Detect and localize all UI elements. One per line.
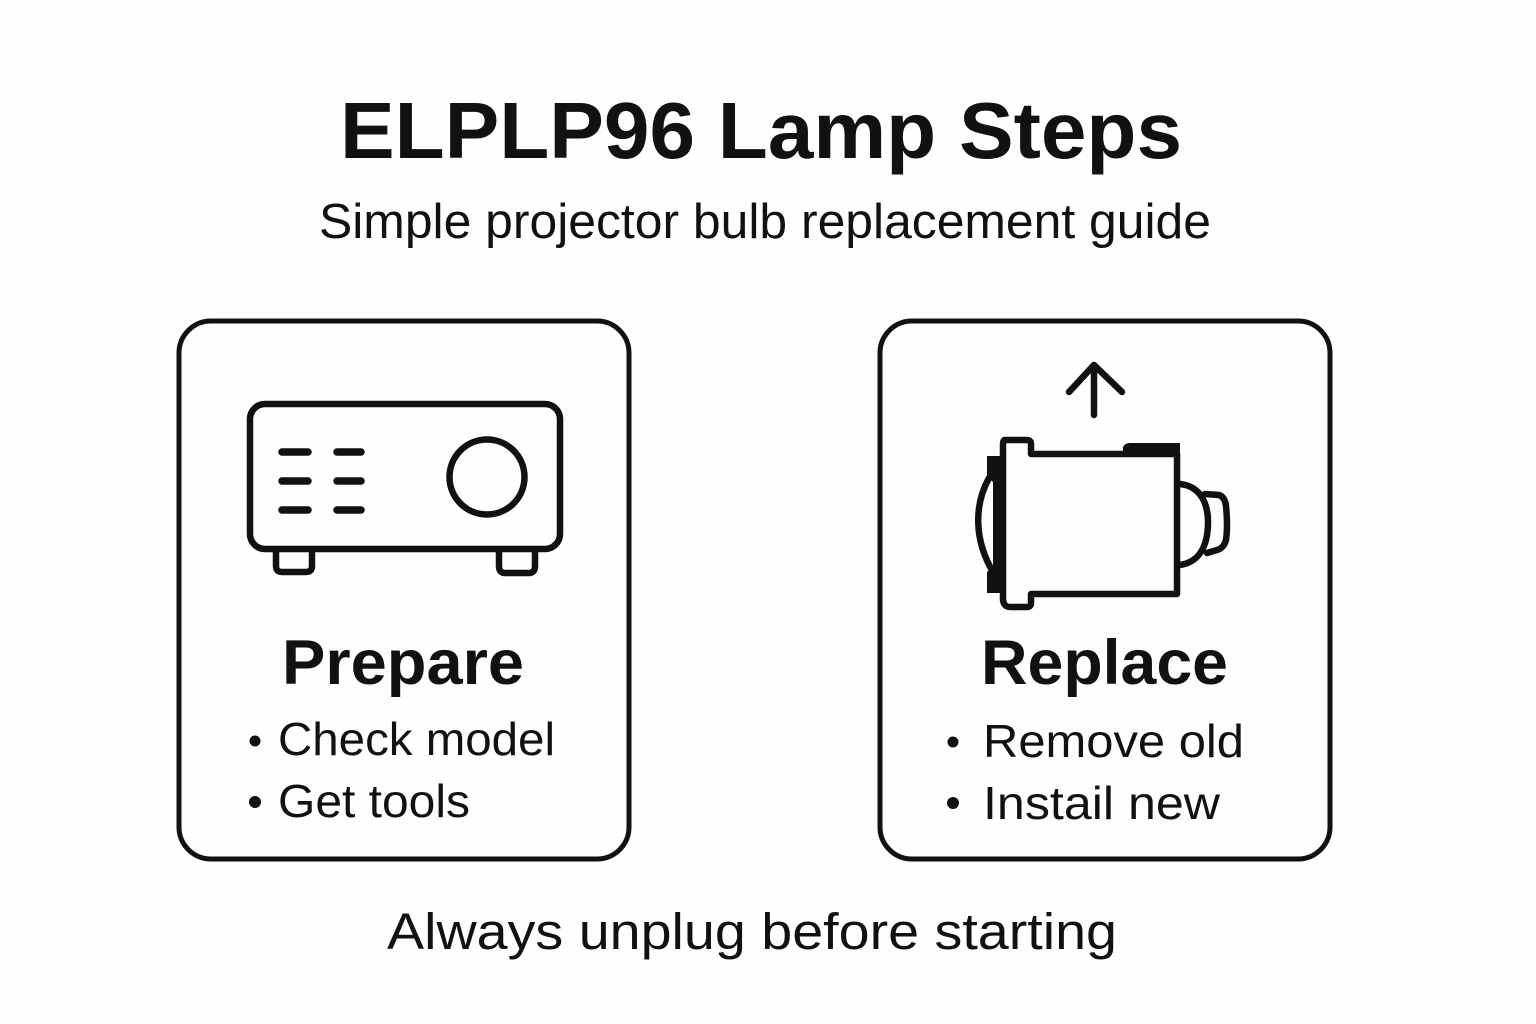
- heading: replace: Replace: [981, 628, 1228, 698]
- icon: projector lamp: [978, 440, 1227, 607]
- subtitle: Simple projector bulb replacement guide: [319, 195, 1211, 249]
- list: prepare steps: Check model: [278, 713, 555, 765]
- panel: prepare: [179, 321, 629, 859]
- panel: replace: [880, 321, 1330, 859]
- panel border: replace: [880, 321, 1330, 859]
- arrow: lift lamp out: [1069, 365, 1122, 415]
- list: replace steps: Remove old: [983, 715, 1244, 767]
- list: prepare steps: [249, 713, 555, 827]
- footer note: Always unplug before starting: [387, 903, 1117, 960]
- heading: prepare: Prepare: [282, 628, 524, 698]
- list: prepare steps: Get tools: [278, 775, 470, 827]
- list: replace steps: Instail new: [983, 777, 1221, 829]
- list: replace steps: [947, 715, 1244, 829]
- panel border: prepare: [179, 321, 629, 859]
- icon: projector: [250, 404, 560, 573]
- title: ELPLP96 Lamp Steps: [340, 86, 1182, 175]
